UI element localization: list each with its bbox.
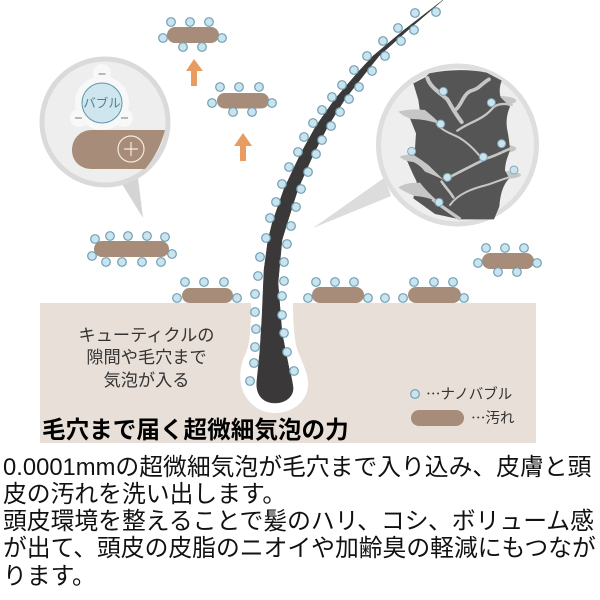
magnifier: hair cuticle close-up	[313, 66, 536, 228]
body text: 0.0001mmの超微細気泡が毛穴まで入り込み、皮膚と頭	[3, 454, 591, 481]
dirt close-up	[72, 130, 165, 169]
body text: ります。	[3, 563, 96, 590]
cuticle cracks	[427, 78, 517, 219]
dirt deposits	[94, 27, 534, 303]
legend	[411, 383, 515, 428]
legend: …汚れ	[471, 407, 515, 428]
bubble halo	[70, 64, 133, 130]
skin annotation: 気泡が入る	[104, 370, 189, 390]
hair strand	[257, 0, 443, 403]
arrow up 2	[234, 133, 252, 161]
plus charge	[118, 136, 144, 162]
bubble label: バブル	[83, 96, 121, 110]
skin annotation: キューティクルの	[79, 325, 214, 345]
skin panel	[40, 303, 536, 443]
magnifier: bubble and dirt interaction	[42, 59, 168, 218]
hair follicle opening	[240, 303, 308, 413]
arrow up 1	[186, 59, 203, 86]
cuticle scales	[406, 70, 510, 219]
body text: 皮の汚れを洗い出します。	[3, 481, 286, 508]
right cuticle plates	[480, 96, 521, 179]
cuticle bubbles	[408, 87, 518, 206]
body text: 頭皮環境を整えることで髪のハリ、コシ、ボリューム感	[3, 508, 594, 535]
nanobubbles	[88, 8, 541, 385]
skin annotation: 隙間や毛穴まで	[86, 347, 207, 367]
legend: …ナノバブル	[426, 383, 512, 404]
body text: が出て、頭皮の皮脂のニオイや加齢臭の軽減にもつなが	[3, 535, 596, 562]
bubble close-up	[82, 83, 122, 123]
left cuticle plates	[398, 109, 444, 202]
negative charges	[75, 74, 128, 118]
heading: 毛穴まで届く超微細気泡の力	[42, 417, 349, 444]
